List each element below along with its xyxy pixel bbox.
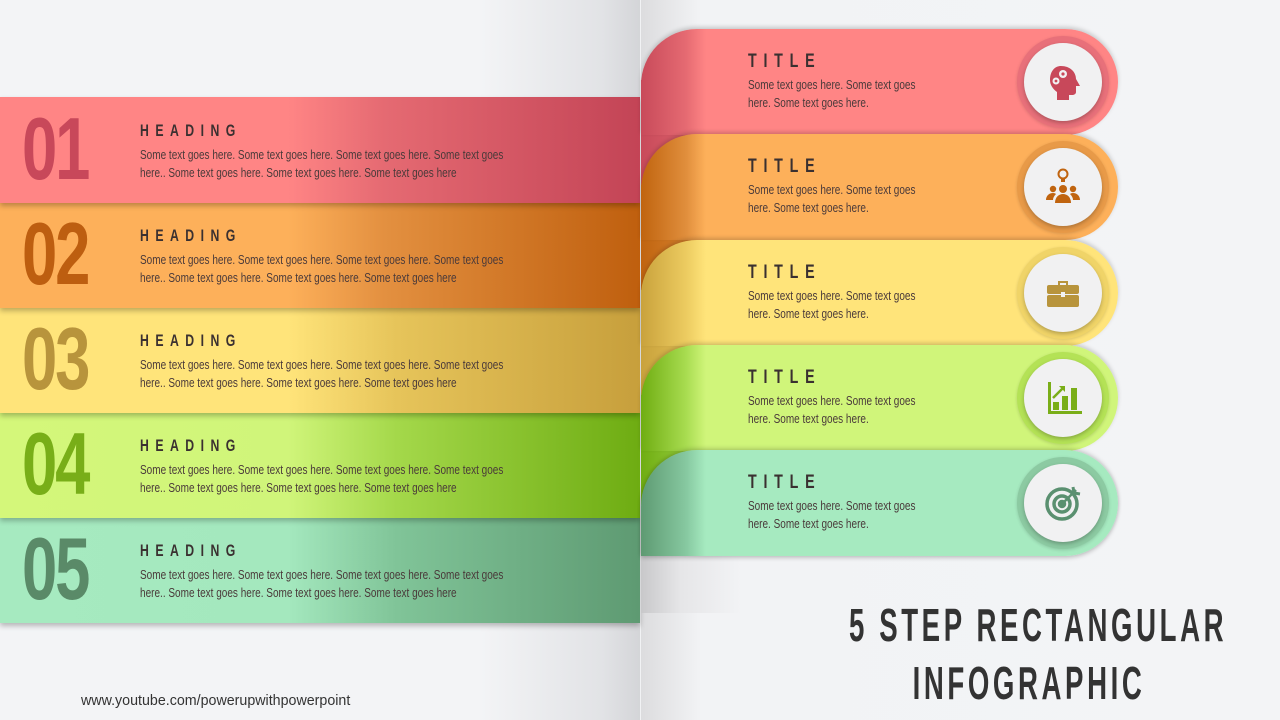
number 05: 05 xyxy=(22,519,88,618)
text 1: here. Some text goes here. xyxy=(748,95,869,110)
text 05: Some text goes here. Some text goes here. Some text goes here. Some text goes xyxy=(140,567,503,582)
heading 02: HEADING xyxy=(140,226,242,245)
title 2: TITLE xyxy=(748,156,821,177)
text 02: here.. Some text goes here. Some text goes here. Some text goes here xyxy=(140,270,457,285)
title 4: TITLE xyxy=(748,367,821,388)
text 4: Some text goes here. Some text goes xyxy=(748,393,915,408)
text 2 xyxy=(748,182,916,215)
icon: target xyxy=(1017,457,1109,549)
number 04: 04 xyxy=(22,414,88,513)
title 3: TITLE xyxy=(748,262,821,283)
panel: left step 04 xyxy=(0,412,640,518)
heading 01: HEADING xyxy=(140,121,242,140)
text 05: here.. Some text goes here. Some text goes here. Some text goes here xyxy=(140,585,457,600)
text 4 xyxy=(748,393,916,426)
text 3: here. Some text goes here. xyxy=(748,306,869,321)
icon: growth chart xyxy=(1017,352,1109,444)
text 3: Some text goes here. Some text goes xyxy=(748,288,915,303)
text 01: Some text goes here. Some text goes here. Some text goes here. Some text goes xyxy=(140,147,503,162)
number 02: 02 xyxy=(22,204,88,303)
text 01: here.. Some text goes here. Some text goes here. Some text goes here xyxy=(140,165,457,180)
text 05 xyxy=(140,567,503,600)
text 5: Some text goes here. Some text goes xyxy=(748,498,915,513)
text 03 xyxy=(140,357,503,390)
panel: title band 3 xyxy=(641,240,1118,346)
text 2: Some text goes here. Some text goes xyxy=(748,182,915,197)
number 03: 03 xyxy=(22,309,88,408)
icon: briefcase xyxy=(1017,247,1109,339)
panel: title band 1 xyxy=(641,29,1118,135)
panel: title band 2 xyxy=(641,134,1118,240)
page curl below last title band xyxy=(641,505,761,613)
footer url: www.youtube.com/powerupwithpowerpoint xyxy=(81,692,350,709)
heading 04: HEADING xyxy=(140,436,242,455)
text 01 xyxy=(140,147,503,180)
text 02 xyxy=(140,252,503,285)
panel: title band 5 xyxy=(641,450,1118,556)
text 1 xyxy=(748,77,916,110)
text 5: here. Some text goes here. xyxy=(748,516,869,531)
text 03: here.. Some text goes here. Some text goes here. Some text goes here xyxy=(140,375,457,390)
icon: head with gears xyxy=(1017,36,1109,128)
panel: left step 01 xyxy=(0,97,640,203)
text 1: Some text goes here. Some text goes xyxy=(748,77,915,92)
heading 03: HEADING xyxy=(140,331,242,350)
panel: left step 03 xyxy=(0,307,640,413)
heading 05: HEADING xyxy=(140,541,242,560)
panel: left step 02 xyxy=(0,202,640,308)
panel: left step 05 xyxy=(0,517,640,623)
text 04: Some text goes here. Some text goes here. Some text goes here. Some text goes xyxy=(140,462,503,477)
icon: team with bulb xyxy=(1017,141,1109,233)
main title: INFOGRAPHIC xyxy=(913,657,1145,709)
text 4: here. Some text goes here. xyxy=(748,411,869,426)
text 03: Some text goes here. Some text goes here. Some text goes here. Some text goes xyxy=(140,357,503,372)
panel: title band 4 xyxy=(641,345,1118,451)
text 04 xyxy=(140,462,503,495)
text 04: here.. Some text goes here. Some text goes here. Some text goes here xyxy=(140,480,457,495)
title 1: TITLE xyxy=(748,51,821,72)
text 02: Some text goes here. Some text goes here. Some text goes here. Some text goes xyxy=(140,252,503,267)
text 3 xyxy=(748,288,916,321)
text 5 xyxy=(748,498,916,531)
text 2: here. Some text goes here. xyxy=(748,200,869,215)
number 01: 01 xyxy=(22,99,88,198)
main title: 5 STEP RECTANGULAR xyxy=(849,599,1227,651)
title 5: TITLE xyxy=(748,472,821,493)
